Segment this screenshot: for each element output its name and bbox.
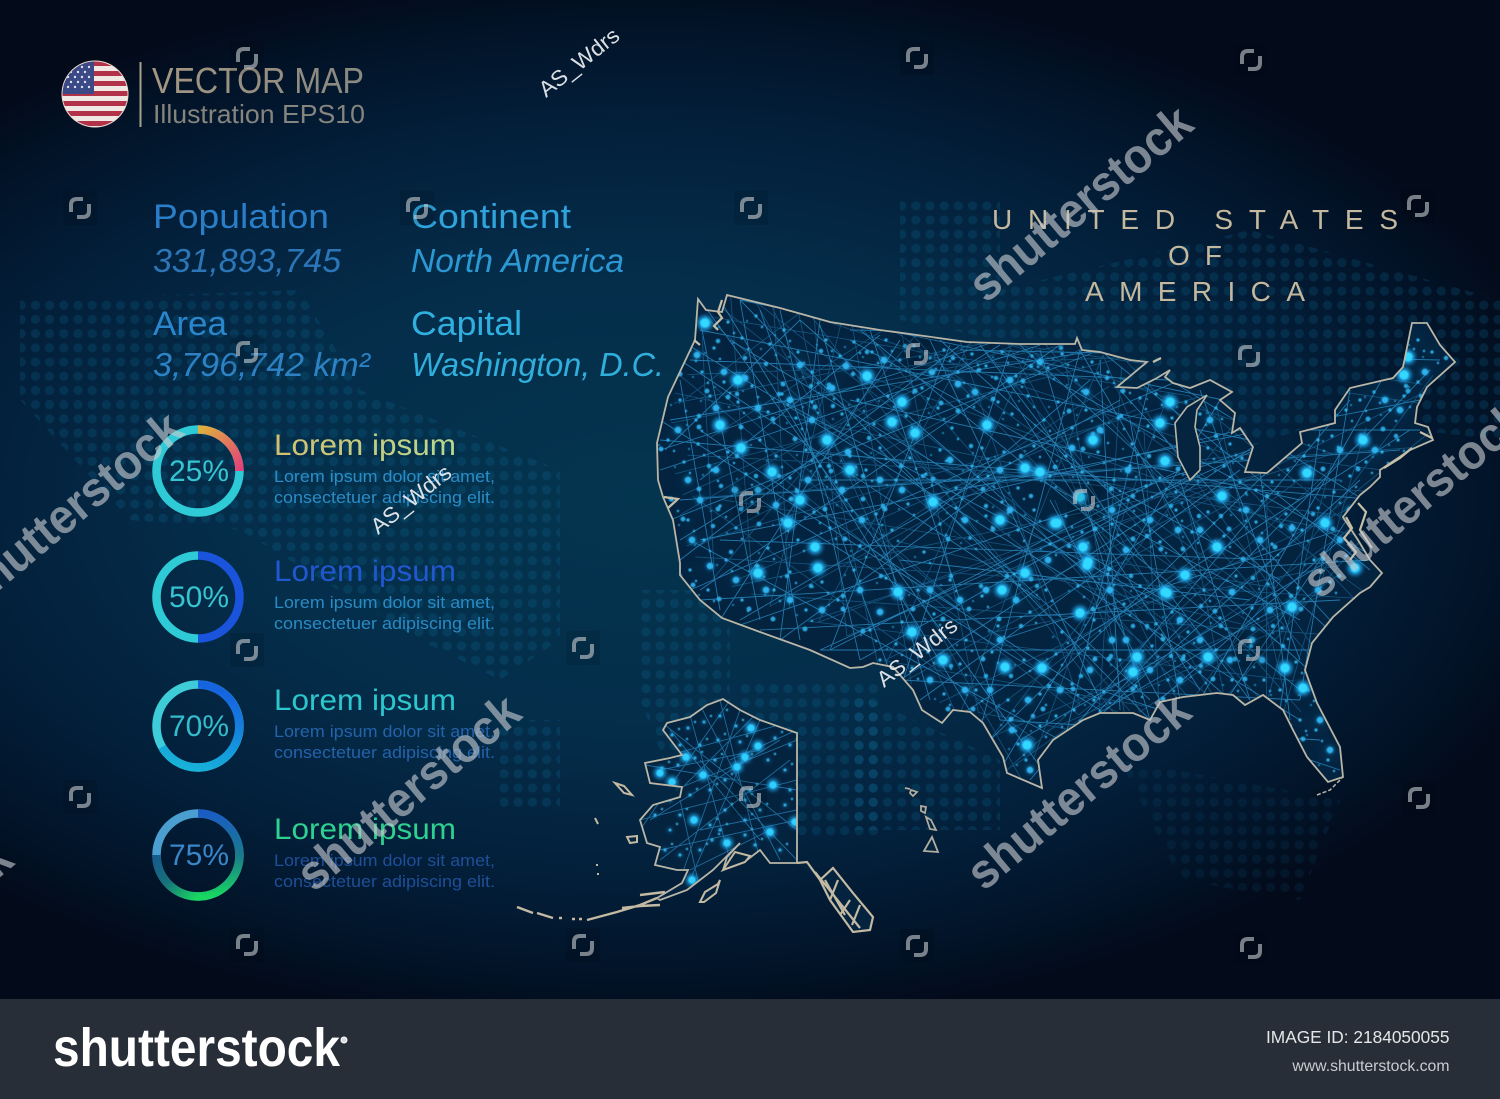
item: 25 percent: Lorem ipsum — [274, 429, 456, 462]
map: Alaska network — [517, 699, 873, 932]
glow halos — [678, 323, 1425, 770]
item: 50 percent: Lorem ipsum — [274, 555, 456, 588]
item: 75 percent: 75% — [169, 839, 229, 872]
fact: area: 3,796,742 km² — [153, 346, 371, 383]
watermark: bracket marks — [63, 41, 1436, 965]
icon: US flag — [60, 60, 130, 130]
footer logo: shutterstock — [53, 1018, 341, 1078]
title: United States of America: OF — [1168, 240, 1222, 271]
item: 70 percent: consectetuer adipiscing elit. — [274, 744, 495, 762]
map: contiguous United States network — [656, 294, 1456, 796]
item: 75 percent: Lorem ipsum — [274, 813, 456, 846]
fact: population: Population — [153, 198, 329, 236]
watermark: AS_Wdrs text: AS_Wdrs — [872, 613, 962, 692]
fact: continent: Continent — [411, 198, 572, 236]
coastal detail — [664, 300, 1432, 560]
watermark: shutterstock text: shutterstock — [956, 682, 1201, 900]
divider — [140, 62, 142, 127]
Aleutian chain and islands — [517, 892, 665, 920]
item: 25 percent: Lorem ipsum dolor sit amet, — [274, 468, 495, 486]
network lines — [660, 296, 1440, 780]
dotted world map backdrop — [20, 200, 1500, 900]
item: 50 percent — [156, 555, 495, 638]
registered mark — [341, 1037, 347, 1043]
fact: area — [153, 305, 371, 383]
item: 70 percent: Lorem ipsum — [274, 684, 456, 717]
item: 75 percent: Lorem ipsum dolor sit amet, — [274, 852, 495, 870]
fact: capital: Capital — [411, 305, 522, 343]
map: Hawaii — [905, 788, 938, 852]
panel: country facts — [153, 198, 664, 383]
item: 75 percent — [156, 813, 495, 896]
watermark: AS_Wdrs text: AS_Wdrs — [534, 23, 624, 102]
fact: population — [153, 198, 342, 279]
watermark: AS_Wdrs text — [366, 23, 962, 692]
Alaska dots — [655, 710, 797, 880]
soft haze — [690, 349, 1402, 767]
title: United States of America — [992, 204, 1398, 307]
coastline outline — [657, 295, 1455, 788]
Florida keys — [1317, 778, 1342, 795]
fact: area: Area — [153, 305, 227, 343]
fact: capital — [411, 305, 664, 383]
item: 25 percent — [156, 429, 495, 512]
watermark: shutterstock text: shutterstock — [286, 683, 531, 901]
title: United States of America: UNITED STATES — [992, 204, 1398, 235]
fact: capital: Washington, D.C. — [411, 346, 664, 383]
item: 70 percent — [156, 684, 495, 768]
Alaska outline — [640, 699, 797, 900]
fact: continent — [411, 198, 624, 279]
item: 50 percent: Lorem ipsum dolor sit amet, — [274, 594, 495, 612]
header: flag and product title — [60, 60, 365, 130]
item: 25 percent: 25% — [169, 455, 229, 488]
small dots — [659, 316, 1446, 789]
Alaska network lines — [640, 700, 797, 890]
watermark: AS_Wdrs text: AS_Wdrs — [366, 460, 456, 539]
item: 25 percent: consectetuer adipiscing elit. — [274, 489, 495, 507]
bright nodes — [705, 323, 1408, 745]
footer bar — [0, 999, 1500, 1099]
image id: IMAGE ID: 2184050055 — [1266, 1027, 1450, 1047]
title: United States of America: AMERICA — [1085, 276, 1305, 307]
item: 75 percent: consectetuer adipiscing elit. — [274, 873, 495, 891]
item: 70 percent: Lorem ipsum dolor sit amet, — [274, 723, 495, 741]
item: 50 percent: consectetuer adipiscing elit. — [274, 615, 495, 633]
watermark: shutterstock text: shutterstock — [958, 94, 1203, 312]
subheading: Illustration EPS10 — [153, 99, 365, 129]
item: 70 percent: 70% — [169, 710, 229, 743]
website: www.shutterstock.com — [1291, 1058, 1450, 1075]
fact: continent: North America — [411, 242, 624, 279]
Panhandle — [797, 862, 873, 932]
heading: vector map: VECTOR MAP — [152, 60, 364, 101]
panel: percentage list — [156, 429, 495, 896]
item: 50 percent: 50% — [169, 581, 229, 614]
Lake Michigan — [1175, 395, 1207, 480]
Alaska glow — [655, 716, 795, 880]
fact: population: 331,893,745 — [153, 242, 342, 279]
